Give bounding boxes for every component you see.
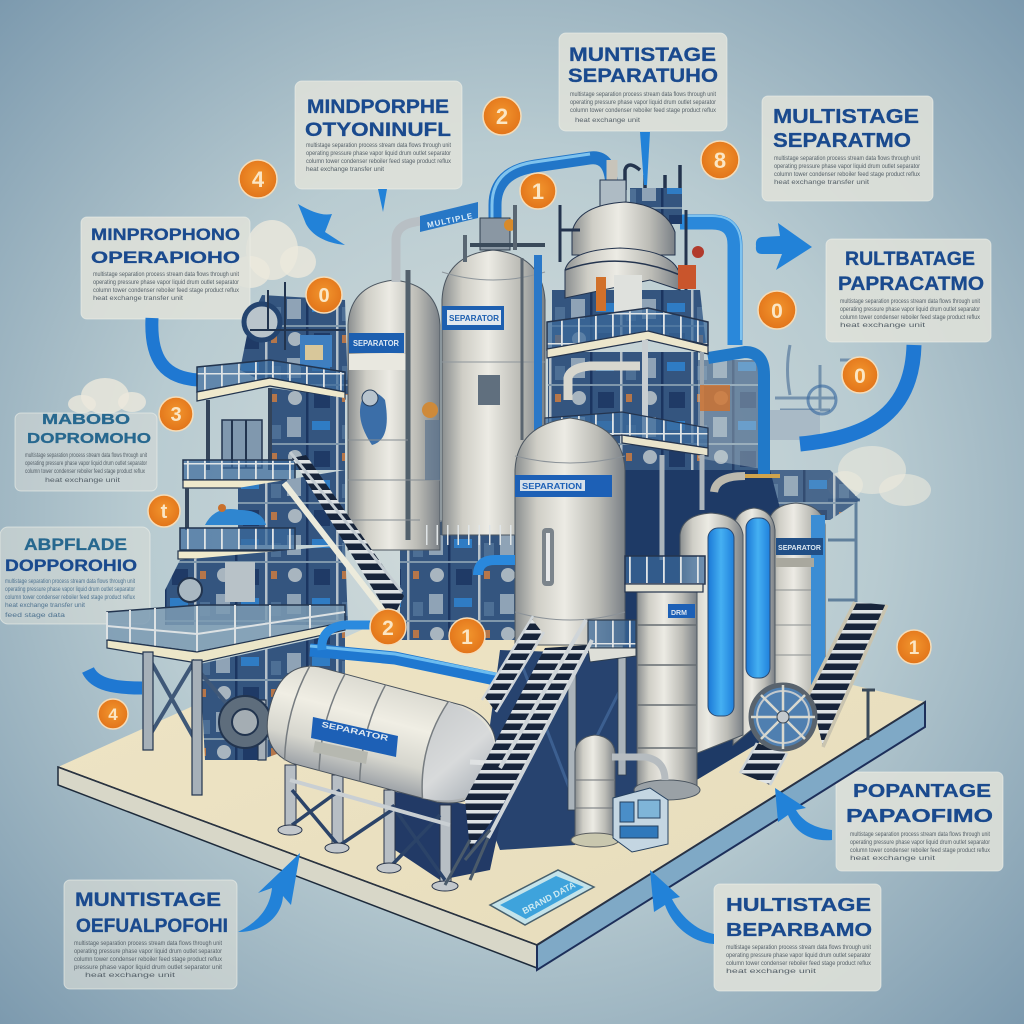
blue inlet tag: MULTIPLE — [426, 211, 474, 230]
panel: top centre-right: MUNTISTAGE — [569, 45, 716, 66]
stair: short rear — [482, 616, 544, 712]
badge 0 right upper — [758, 291, 796, 329]
panel: bottom left: multistage separation process stream data flows through unit — [74, 940, 222, 947]
panel: lower right: POPANTAGE — [853, 781, 991, 801]
badge 1 right — [897, 630, 931, 664]
panel: upper right — [762, 96, 933, 201]
floor plaque — [490, 870, 594, 925]
gantry under vessel C — [520, 620, 636, 810]
badge 0 right — [842, 357, 878, 393]
panel: right — [826, 239, 991, 342]
panel: lower left: feed stage data — [5, 612, 65, 619]
segmented column: DRM — [671, 610, 687, 617]
panel: mid left: heat exchange unit — [45, 477, 120, 484]
left scaffold tier 2 — [183, 420, 345, 545]
panel: bottom centre: operating pressure phase vapor liquid drum outlet separator — [726, 952, 872, 959]
pointer: top panel — [640, 132, 650, 185]
panel: bottom left — [64, 880, 237, 989]
panel: top centre-right: heat exchange unit — [575, 117, 640, 124]
panel: upper right: column tower condenser reboiler feed stage product reflux — [774, 171, 921, 178]
badge 0 right: 0 — [854, 365, 866, 388]
vessel B — [422, 250, 545, 535]
vessel C: SEPARATION — [522, 482, 582, 491]
panel: upper left: heat exchange transfer unit — [93, 295, 183, 302]
arrow: top right — [756, 223, 812, 270]
panel: top centre-right — [559, 33, 727, 131]
panel: lower right: column tower condenser reboiler feed stage product reflux — [850, 847, 991, 854]
panel: upper right: SEPARATMO — [773, 130, 911, 152]
panel: right: operating pressure phase vapor liquid drum outlet separator — [840, 306, 981, 313]
badge t left: t — [161, 501, 168, 523]
vessel C — [515, 418, 625, 645]
arrow: lower left — [238, 853, 300, 932]
blue pipe: upper right — [680, 216, 741, 345]
badge 8 top right: 8 — [714, 148, 726, 173]
mid equipment cluster — [426, 535, 515, 575]
blue main header pipe — [310, 625, 500, 680]
panel: upper left: OPERAPIOHO — [91, 248, 240, 267]
panel: bottom centre — [714, 884, 881, 991]
arrow: bottom centre — [650, 870, 714, 944]
badge 0 right upper: 0 — [771, 300, 783, 323]
panel: bottom left: MUNTISTAGE — [75, 890, 221, 911]
panel: lower right: PAPAOFIMO — [846, 806, 993, 826]
vessel E1 — [680, 476, 780, 760]
panel: upper left: MINPROPHONO — [91, 225, 240, 244]
badge 1 right: 1 — [909, 638, 920, 659]
vessel A — [348, 270, 440, 550]
panel: upper right: multistage separation process stream data flows through unit — [774, 155, 920, 162]
badge 1 centre — [449, 618, 485, 654]
panel: top centre-left: operating pressure phase vapor liquid drum outlet separator — [306, 150, 452, 157]
vessel A: SEPARATOR — [353, 339, 399, 348]
platform base — [58, 590, 925, 970]
inlet elbow on vessel A — [396, 212, 470, 282]
panel: right: multistage separation process stream data flows through unit — [840, 298, 980, 305]
badge 0 upper left: 0 — [318, 285, 330, 307]
panel: right: PAPRACATMO — [838, 274, 984, 295]
left scaffold tier 3 — [165, 504, 348, 625]
panel: lower left: ABPFLADE — [24, 535, 127, 554]
blue pipe: right sweep — [800, 345, 914, 444]
small receiver tank — [571, 735, 665, 847]
badge 3 left — [159, 397, 193, 431]
panel: bottom left: operating pressure phase vapor liquid drum outlet separator — [74, 948, 223, 955]
valve cluster on vessel B — [465, 205, 545, 262]
blue pipe: middle right — [708, 352, 764, 478]
badge t left — [148, 495, 180, 527]
panel: top centre-left: heat exchange transfer unit — [306, 166, 384, 173]
panel: upper right: operating pressure phase vapor liquid drum outlet separator — [774, 163, 921, 170]
tank deck railing — [625, 556, 705, 592]
dark bracing under tank — [385, 790, 505, 880]
panel: mid left: multistage separation process stream data flows through unit — [25, 452, 147, 459]
panel: mid left: MABOBO — [42, 411, 130, 428]
panel: mid left: column tower condenser reboiler feed stage product reflux — [25, 468, 146, 475]
badge 4 top left — [239, 160, 277, 198]
panel: lower right: operating pressure phase vapor liquid drum outlet separator — [850, 839, 991, 846]
panel: lower left: multistage separation process stream data flows through unit — [5, 578, 135, 585]
vessel B: SEPARATOR — [449, 314, 499, 323]
panel: bottom left: heat exchange unit — [85, 972, 175, 979]
blue pipe: feed arch — [492, 154, 612, 235]
vessel E3: SEPARATOR — [778, 545, 821, 552]
badge 1 centre: 1 — [461, 626, 473, 649]
lower left deck — [107, 605, 345, 795]
panel: upper right: MULTISTAGE — [773, 106, 919, 128]
panel: top centre-left: multistage separation process stream data flows through unit — [306, 142, 451, 149]
panel: upper right: heat exchange transfer unit — [774, 179, 869, 186]
badge 1 top — [520, 173, 556, 209]
flywheel — [751, 685, 815, 749]
panel: top centre-right: SEPARATUHO — [568, 66, 718, 87]
badge 2 top: 2 — [496, 104, 508, 129]
vessel E3 — [768, 503, 825, 710]
panel: top centre-left: MINDPORPHE — [307, 97, 449, 118]
badge 8 top right — [701, 141, 739, 179]
panel: upper left: multistage separation process stream data flows through unit — [93, 271, 239, 278]
blue pipe: left lower — [88, 670, 142, 688]
panel: bottom centre: BEPARBAMO — [726, 920, 872, 940]
panel: bottom left: OEFUALPOFOHI — [76, 916, 228, 937]
panel: lower right — [836, 772, 1003, 871]
badge 4 lower left — [98, 699, 128, 729]
panel: mid left: DOPROMOHO — [27, 430, 151, 447]
horizontal tank — [257, 657, 506, 814]
badge 2 centre — [370, 609, 406, 645]
badge 0 upper left — [306, 277, 342, 313]
floor plaque: BRAND DATA — [521, 880, 578, 916]
segmented column — [634, 592, 700, 800]
tank label plate — [311, 717, 398, 764]
badge 2 centre: 2 — [382, 617, 394, 640]
horizontal tank supports — [278, 765, 458, 891]
arrow: lower right — [775, 788, 832, 840]
arrow: top left — [298, 204, 345, 245]
panel: lower left — [0, 527, 150, 624]
panel: mid left: operating pressure phase vapor liquid drum outlet separator — [25, 460, 148, 467]
panel: lower left: column tower condenser reboiler feed stage product reflux — [5, 594, 136, 601]
panel: top centre-right: column tower condenser reboiler feed stage product reflux — [570, 107, 717, 114]
panel: upper left — [81, 217, 250, 319]
panel: right: heat exchange unit — [840, 322, 925, 329]
panel: lower left: heat exchange transfer unit — [5, 602, 85, 609]
blue pipe: left upper — [152, 318, 198, 380]
panel: top centre-right: operating pressure phase vapor liquid drum outlet separator — [570, 99, 717, 106]
panel: right: column tower condenser reboiler feed stage product reflux — [840, 314, 981, 321]
panel: lower left: DOPPOROHIO — [5, 556, 137, 575]
control cabinet — [613, 788, 668, 852]
panel: top centre-right: multistage separation process stream data flows through unit — [570, 91, 716, 98]
panel: upper left: operating pressure phase vapor liquid drum outlet separator — [93, 279, 240, 286]
panel: right: RULTBATAGE — [845, 249, 975, 270]
badge 4 top left: 4 — [252, 167, 265, 192]
panel: mid left — [15, 411, 157, 491]
badge 4 lower left: 4 — [108, 705, 118, 724]
panel: bottom centre: multistage separation process stream data flows through unit — [726, 944, 871, 951]
panel: lower right: multistage separation process stream data flows through unit — [850, 831, 990, 838]
panel: bottom centre: HULTISTAGE — [726, 895, 871, 915]
badge 1 top: 1 — [532, 179, 544, 204]
stair: left scaffold — [284, 452, 404, 620]
panel: bottom left: column tower condenser reboiler feed stage product reflux — [74, 956, 223, 963]
stair: right side — [808, 602, 887, 747]
right mid deck — [545, 366, 730, 560]
panel: top centre-left: column tower condenser reboiler feed stage product reflux — [306, 158, 452, 165]
left scaffold tier 1 — [197, 282, 348, 470]
tank label plate: SEPARATOR — [321, 720, 389, 743]
tank outlet pipe — [470, 762, 510, 764]
vessel E2 — [733, 508, 775, 745]
panel: bottom left: pressure phase vapor liquid drum outlet separator unit — [74, 964, 222, 971]
blue inlet tag — [420, 202, 478, 232]
stair: lower right — [740, 743, 787, 785]
panel: bottom centre: heat exchange unit — [726, 968, 816, 975]
faded machinery behind right side — [770, 345, 860, 620]
upper right reactor — [547, 165, 708, 440]
machinery cluster behind vessels — [400, 352, 860, 850]
badge 2 top — [483, 97, 521, 135]
clouds — [68, 220, 931, 506]
panel: top centre-left: OTYONINUFL — [305, 120, 451, 141]
panel: top centre-left — [295, 81, 462, 189]
panel: upper left: column tower condenser reboiler feed stage product reflux — [93, 287, 240, 294]
panel: lower right: heat exchange unit — [850, 855, 935, 862]
stair: front centre — [445, 620, 592, 885]
panel: lower left: operating pressure phase vapor liquid drum outlet separator — [5, 586, 136, 593]
panel: bottom centre: column tower condenser reboiler feed stage product reflux — [726, 960, 872, 967]
pointer: left top panel — [378, 189, 387, 212]
badge 3 left: 3 — [170, 404, 182, 426]
